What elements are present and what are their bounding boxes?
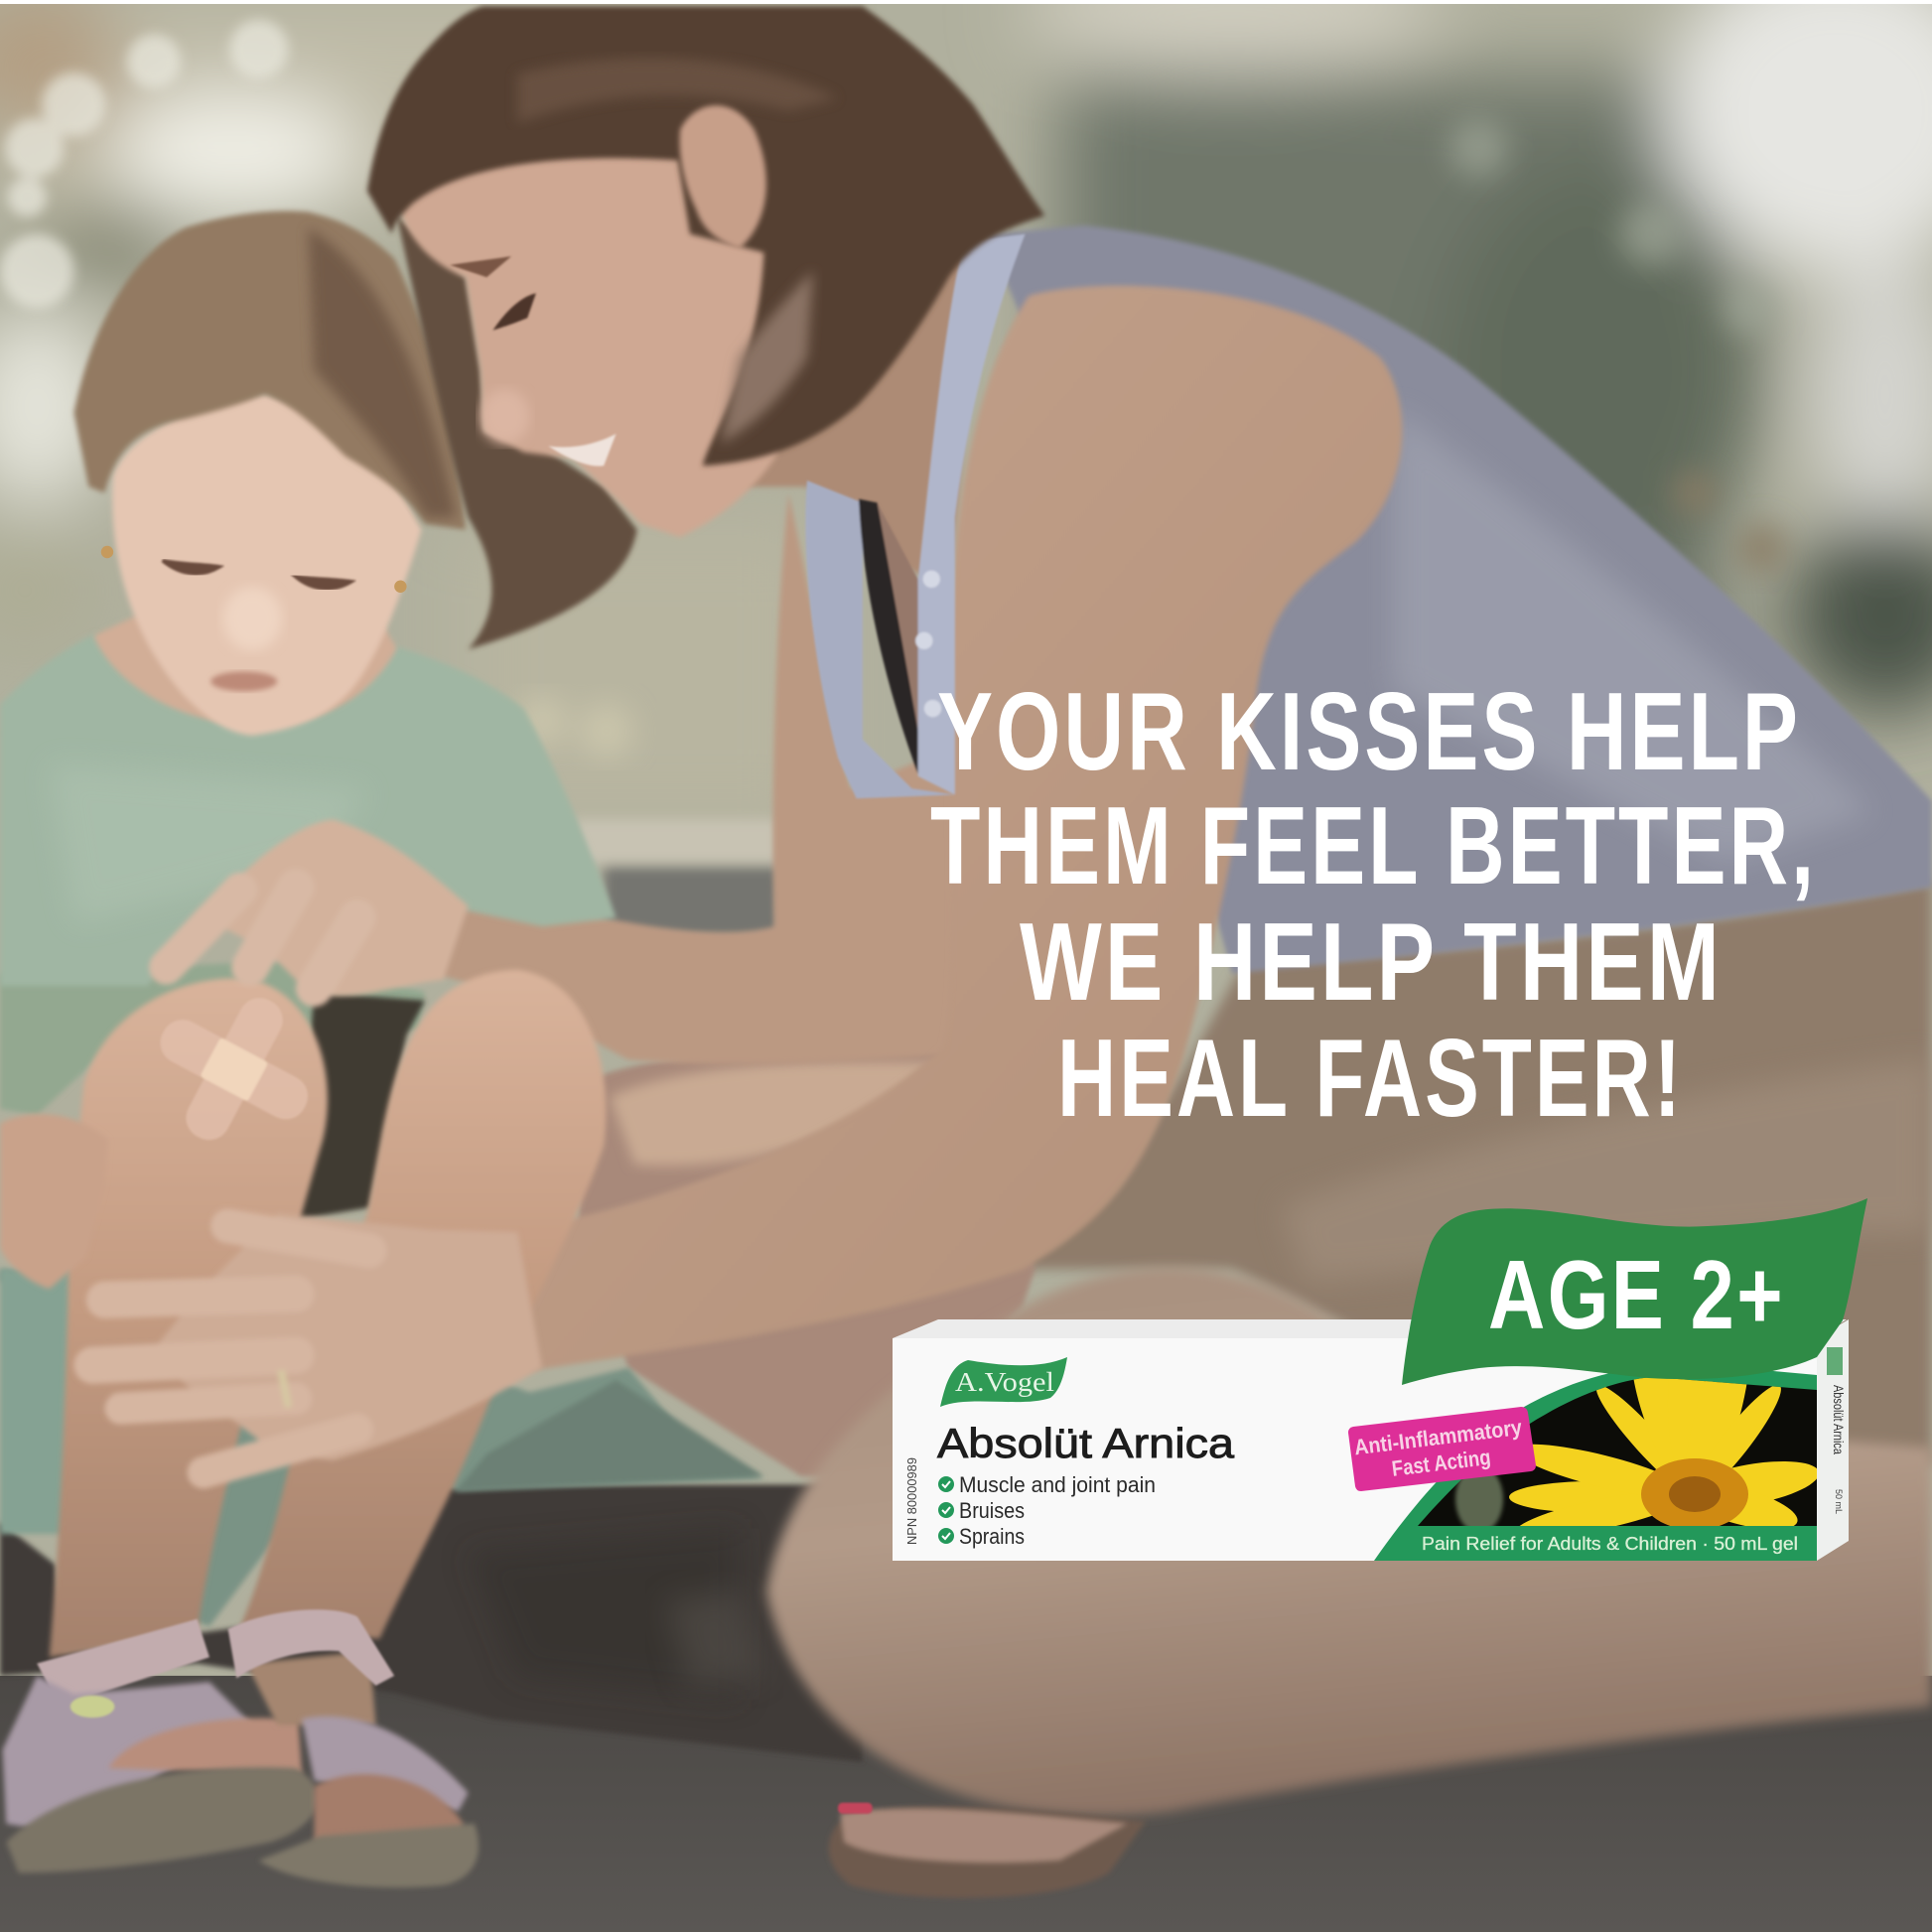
box top flap [893,1319,1847,1338]
headline [930,670,1817,1140]
age banner [1402,1198,1867,1385]
photo: child [0,211,763,1887]
mother's foreground leg [766,1268,1932,1816]
child's skirt shadow between knees [296,992,425,1220]
photo: mother's body [431,225,1932,1898]
mother's shorts [1011,881,1932,1466]
flower image [1418,1378,1817,1526]
child's right leg [240,970,606,1639]
mother's hair strand falling in front [397,215,637,649]
benefits list [938,1472,1156,1549]
child's face [112,394,421,736]
A.Vogel logo [940,1357,1067,1407]
box front panel [893,1338,1817,1561]
child's lower skirt and drape [0,1269,763,1626]
left sandal [2,1619,318,1872]
mother's tucked leg [579,1047,1035,1476]
mother's neck [690,234,986,592]
pink claim badge: Anti-Inflammatory [1353,1415,1524,1459]
age banner: AGE 2+ [1488,1240,1785,1349]
A.Vogel logo: A.Vogel [955,1367,1054,1397]
benefits list: Muscle and joint pain [959,1472,1156,1497]
NPN number: NPN 80000989 [904,1457,919,1545]
mother's hair [367,6,1044,466]
box side panel [1817,1319,1849,1561]
child's t-shirt [0,633,617,986]
mother's top [986,225,1932,973]
child's neck [93,604,397,725]
headline: HEAL FASTER! [1057,1017,1684,1140]
mother's face [397,98,788,537]
stone step and ground [0,1485,1932,1932]
product name: Absolüt Arnica [937,1420,1235,1466]
big arm [466,286,1402,1374]
child's hair [73,211,466,530]
bandage on knee [127,963,342,1174]
white edge strip at top of image [0,0,1932,4]
mother's foot [829,1807,1146,1898]
box side panel: Absolüt Arnica [1831,1385,1847,1454]
box side panel: 50 mL [1834,1489,1844,1514]
green swoosh and bottom strip [1374,1365,1817,1561]
pink claim badge: Fast Acting [1390,1445,1492,1481]
benefits list: Bruises [959,1498,1025,1523]
photo: mother's head [367,6,1044,649]
box tagline: Pain Relief for Adults & Children · 50 mL gel [1422,1534,1798,1554]
child's left leg [50,978,328,1657]
stone ledge behind [573,819,782,940]
product box [893,1198,1867,1561]
mother's top: placket panel [805,234,1026,798]
mother's hand on lower leg [92,1213,542,1472]
right sandal [228,1609,479,1887]
child's hand [0,1114,108,1289]
mother's ear [680,105,766,249]
headline: WE HELP THEM [1020,900,1723,1024]
pink claim badge [1348,1407,1536,1491]
child's skirt [0,961,425,1115]
benefits list: Sprains [959,1524,1025,1549]
mother's hand on knee [167,819,469,996]
second arm towards child's knee [431,492,973,1064]
